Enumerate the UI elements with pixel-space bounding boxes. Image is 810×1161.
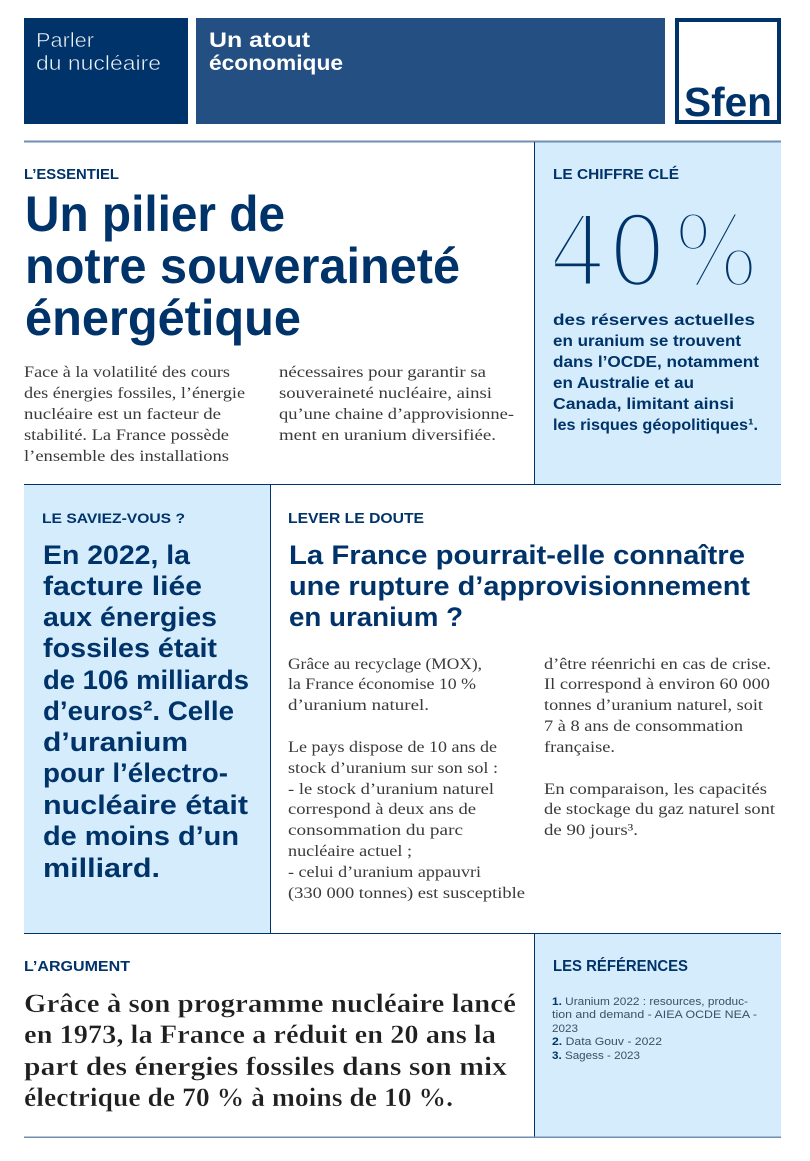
main title: notre souveraineté	[25, 238, 460, 294]
key figure caption	[553, 312, 760, 434]
references list: 1. Uranium 2022 : resources, produc-	[552, 996, 748, 1008]
intro text, column 2: souveraineté nucléaire, ainsi	[279, 385, 493, 402]
fact text: aux énergies	[43, 602, 217, 632]
header: Parler du nucléaire box	[24, 18, 188, 124]
section: le chiffre clé	[548, 166, 760, 434]
answer text, column 2: française.	[544, 739, 615, 756]
main title: énergétique	[25, 290, 301, 346]
references list: 2023	[552, 1023, 578, 1035]
intro text, column 1: stabilité. La France possède	[24, 427, 229, 444]
label: l'essentiel: L’ESSENTIEL	[24, 167, 119, 183]
intro text, column 2: nécessaires pour garantir sa	[279, 364, 486, 381]
answer text, column 1: Grâce au recyclage (MOX),	[288, 656, 482, 673]
fact text: d’euros². Celle	[43, 696, 234, 726]
label: les références: LES RÉFÉRENCES	[553, 958, 688, 975]
answer text, column 2: Il correspond à environ 60 000	[544, 676, 770, 693]
fact text: d’uranium	[43, 727, 188, 757]
references list: 3. Sagess - 2023	[552, 1050, 640, 1062]
answer text, column 1: correspond à deux ans de	[288, 801, 476, 818]
header: Un atout économique box: économique	[209, 52, 343, 75]
header: Parler du nucléaire box: du nucléaire	[36, 53, 161, 75]
argument text: Grâce à son programme nucléaire lancé	[24, 989, 516, 1018]
fact text	[43, 540, 249, 883]
section: l'argument	[24, 959, 516, 1112]
label: l'argument: L’ARGUMENT	[24, 959, 130, 975]
panel: le saviez-vous background	[24, 485, 270, 933]
section: les références	[552, 958, 757, 1062]
answer text, column 1: consommation du parc	[288, 822, 463, 839]
argument text: en 1973, la France a réduit en 20 ans la	[24, 1020, 496, 1049]
answer text, column 1	[288, 656, 525, 902]
argument text: électrique de 70 % à moins de 10 %.	[24, 1083, 453, 1112]
key figure: 40 %: %	[673, 193, 759, 310]
fact text: facture liée	[43, 571, 202, 601]
key figure caption: les risques géopolitiques¹.	[553, 417, 758, 434]
label: le chiffre clé: LE CHIFFRE CLÉ	[553, 166, 679, 183]
answer text, column 1: Le pays dispose de 10 ans de	[288, 739, 497, 756]
answer text, column 1: (330 000 tonnes) est susceptible	[288, 885, 525, 902]
answer text, column 2: d’être réenrichi en cas de crise.	[544, 656, 771, 673]
intro text, column 1: des énergies fossiles, l’énergie	[24, 385, 245, 402]
panel: le chiffre clé background	[535, 142, 781, 484]
key figure: 40 %: 40	[548, 193, 667, 310]
answer text, column 1: - celui d’uranium appauvri	[288, 864, 482, 881]
main title: Un pilier de	[25, 186, 285, 242]
header: Un atout économique box	[196, 18, 665, 124]
answer text, column 2: 7 à 8 ans de consommation	[544, 718, 743, 735]
fact text: de 106 milliards	[43, 665, 249, 695]
argument text: part des énergies fossiles dans son mix	[24, 1052, 507, 1081]
question heading: La France pourrait-elle connaître	[289, 540, 745, 570]
answer text, column 2: tonnes d’uranium naturel, soit	[544, 697, 764, 714]
intro text, column 2	[279, 364, 514, 444]
key figure: 40 %	[548, 193, 759, 310]
fact text: fossiles était	[43, 633, 217, 663]
fact text: pour l’électro-	[43, 758, 228, 788]
intro text, column 1	[24, 364, 245, 465]
logo: Sfen	[677, 20, 779, 125]
intro text, column 2: ment en uranium diversifiée.	[279, 427, 496, 444]
intro text, column 1: l’ensemble des installations	[24, 448, 229, 465]
answer text, column 1: stock d’uranium sur son sol :	[288, 760, 498, 777]
key figure caption: des réserves actuelles	[553, 312, 755, 329]
argument text	[24, 989, 516, 1112]
section: lever le doute	[288, 511, 776, 902]
label: le saviez-vous: LE SAVIEZ-VOUS ?	[42, 510, 185, 526]
answer text, column 2: de 90 jours³.	[544, 822, 638, 839]
intro text, column 1: Face à la volatilité des cours	[24, 364, 230, 381]
fact text: milliard.	[43, 853, 160, 883]
fact text: de moins d’un	[43, 821, 239, 851]
answer text, column 2: de stockage du gaz naturel sont	[544, 801, 776, 818]
references list: 2. Data Gouv - 2022	[552, 1036, 662, 1048]
header: Un atout économique box: Un atout	[209, 29, 310, 52]
references list: tion and demand - AIEA OCDE NEA -	[552, 1009, 757, 1021]
key figure caption: en uranium se trouvent	[553, 333, 742, 350]
label: lever le doute: LEVER LE DOUTE	[288, 511, 424, 527]
intro text, column 1: nucléaire est un facteur de	[24, 406, 221, 423]
header: Parler du nucléaire box: Parler	[36, 30, 94, 52]
question heading: en uranium ?	[289, 602, 463, 632]
question heading: une rupture d’approvisionnement	[289, 571, 750, 601]
question heading	[289, 540, 750, 632]
answer text, column 1: d’uranium naturel.	[288, 697, 429, 714]
panel: les références background	[535, 934, 781, 1137]
fact text: En 2022, la	[43, 540, 191, 570]
answer text, column 1: la France économise 10 %	[288, 676, 476, 693]
section: le saviez-vous	[42, 510, 249, 883]
key figure caption: Canada, limitant ainsi	[553, 396, 734, 413]
section: l'essentiel	[24, 167, 514, 465]
key figure caption: en Australie et au	[553, 375, 694, 392]
main title	[25, 186, 460, 346]
key figure caption: dans l’OCDE, notamment	[553, 354, 760, 371]
answer text, column 2	[544, 656, 776, 839]
answer text, column 1: nucléaire actuel ;	[288, 843, 412, 860]
answer text, column 1: - le stock d’uranium naturel	[288, 781, 495, 798]
intro text, column 2: qu’une chaine d’approvisionne-	[279, 406, 514, 423]
logo: Sfen: Sfen	[684, 79, 772, 125]
references list	[552, 996, 757, 1062]
fact text: nucléaire était	[43, 790, 248, 820]
answer text, column 2: En comparaison, les capacités	[544, 781, 767, 798]
